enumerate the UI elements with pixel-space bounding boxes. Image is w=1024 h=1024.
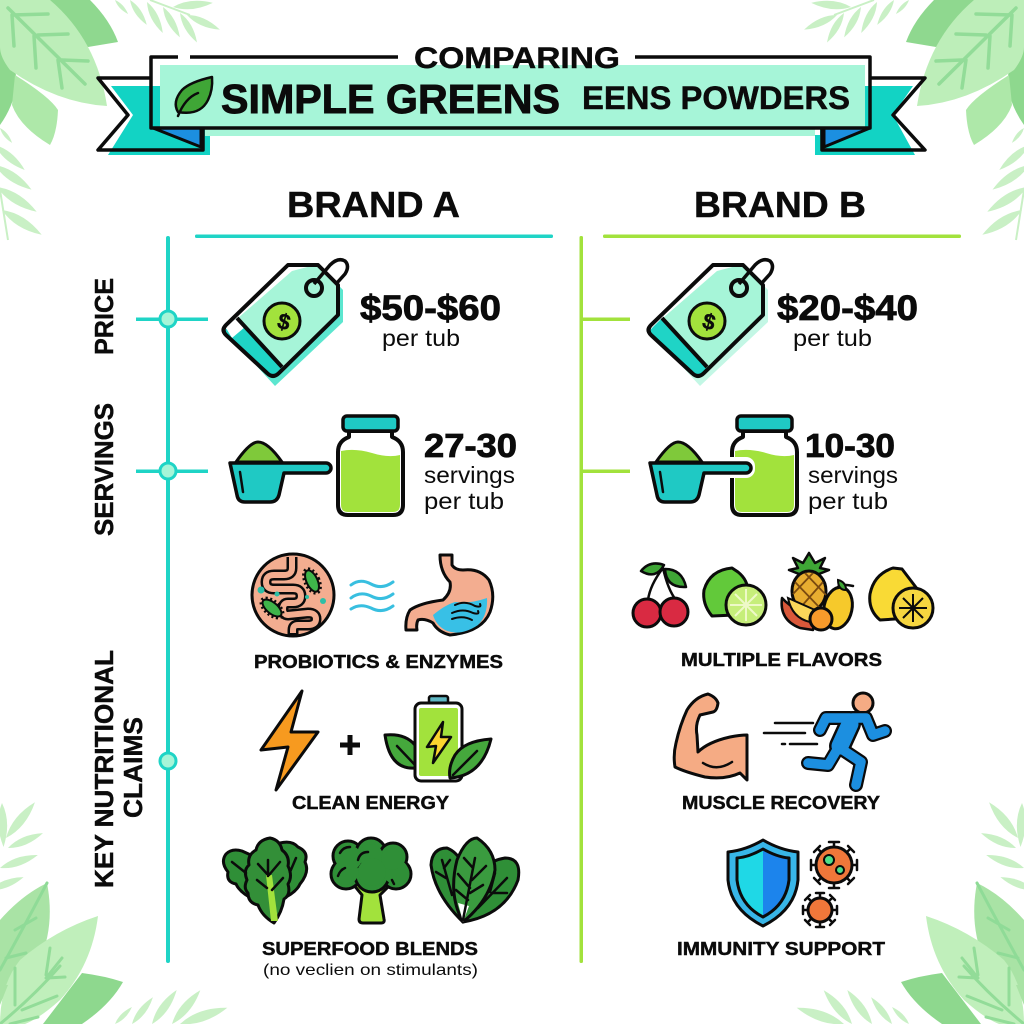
- price unit A: per tub: [382, 325, 460, 351]
- label: clean energy: CLEAN ENERGY: [292, 793, 449, 813]
- icon: spinach: [431, 838, 519, 922]
- icon: price tag A: [224, 260, 348, 386]
- label: immunity support: IMMUNITY SUPPORT: [677, 938, 886, 959]
- price unit B: per tub: [793, 325, 872, 351]
- icon: price tag B: $: [700, 308, 718, 335]
- icon: broccoli: [331, 838, 411, 923]
- note: stimulants: (no veclien on stimulants): [263, 962, 478, 979]
- icon: kale: [223, 838, 307, 923]
- timeline node: price: [160, 311, 176, 327]
- icon: tropical fruit: [782, 553, 856, 631]
- servings unit A: servings: [424, 462, 515, 488]
- heading: brand B: BRAND B: [694, 184, 866, 225]
- icon: lemon: [870, 568, 933, 628]
- icon: lightning bolt: [261, 691, 318, 790]
- servings value B: 10-30: [805, 427, 895, 464]
- timeline node: claims: [160, 753, 176, 769]
- panel: muscle recovery: [674, 693, 885, 813]
- banner outline: [151, 57, 870, 128]
- icon: leaf: [176, 77, 212, 116]
- decoration: top-right leaves: [803, 0, 1024, 240]
- row label: claims: CLAIMS: [118, 717, 148, 818]
- icon: large virus: [811, 842, 857, 888]
- row label: servings: SERVINGS: [89, 403, 119, 536]
- label: multiple flavors: MULTIPLE FLAVORS: [681, 649, 882, 670]
- icon: lime: [704, 568, 766, 625]
- heading: brand A: BRAND A: [287, 184, 460, 225]
- panel: multiple flavors: [633, 553, 933, 670]
- timeline node: servings: [160, 463, 176, 479]
- icon: stomach: [406, 555, 493, 635]
- icon: plus: [340, 735, 360, 755]
- icon: scoop A: [230, 442, 331, 502]
- decoration: bottom-right leaves: [795, 799, 1024, 1024]
- title line: eens powders: EENS POWDERS: [582, 80, 850, 116]
- icon: shield: [728, 840, 798, 926]
- icon: flexed arm: [674, 694, 747, 780]
- panel: brand A servings: [230, 416, 517, 515]
- panel: probiotics and enzymes: [252, 554, 503, 672]
- label: superfood blends: SUPERFOOD BLENDS: [262, 939, 478, 959]
- icon: price tag B: [648, 260, 772, 386]
- icon: jar A: [338, 416, 403, 515]
- icon: runner: [808, 693, 885, 785]
- panel: immunity support: [677, 840, 886, 959]
- banner mint panel: [160, 65, 865, 136]
- panel: superfood blends: [223, 838, 519, 979]
- decoration: top-left leaves: [0, 0, 221, 240]
- decoration: bottom-left leaves: [0, 799, 229, 1024]
- icon: scoop B: [650, 442, 755, 502]
- icon: waves: [351, 581, 393, 611]
- panel: brand B price: [648, 260, 918, 386]
- servings unit B: per tub: [808, 488, 888, 514]
- icon: speed lines: [764, 723, 817, 744]
- row label: price: PRICE: [89, 278, 119, 355]
- title line: comparing: COMPARING: [414, 42, 620, 75]
- price value A: $50-$60: [360, 289, 501, 328]
- right ribbon tail: [815, 78, 925, 155]
- title banner: [98, 42, 925, 155]
- row label: key nutritional: KEY NUTRITIONAL: [89, 650, 119, 888]
- price value B: $20-$40: [777, 289, 918, 328]
- left ribbon tail: [98, 78, 210, 155]
- panel: brand A price: [224, 260, 501, 386]
- icon: jar B: [732, 416, 797, 515]
- label: muscle recovery: MUSCLE RECOVERY: [682, 792, 881, 813]
- label: probiotics: PROBIOTICS & ENZYMES: [254, 652, 503, 672]
- servings unit A: per tub: [424, 488, 504, 514]
- servings unit B: servings: [808, 462, 898, 488]
- icon: cherries: [633, 563, 688, 627]
- icon: battery with leaves: [385, 696, 491, 781]
- panel: brand B servings: [650, 416, 898, 515]
- icon: gut with bacteria: [252, 554, 334, 636]
- title line: simple greens: SIMPLE GREENS: [221, 76, 560, 122]
- icon: price tag A: $: [275, 308, 293, 335]
- servings value A: 27-30: [424, 427, 517, 464]
- panel: clean energy: [261, 691, 491, 813]
- icon: small virus: [803, 893, 837, 927]
